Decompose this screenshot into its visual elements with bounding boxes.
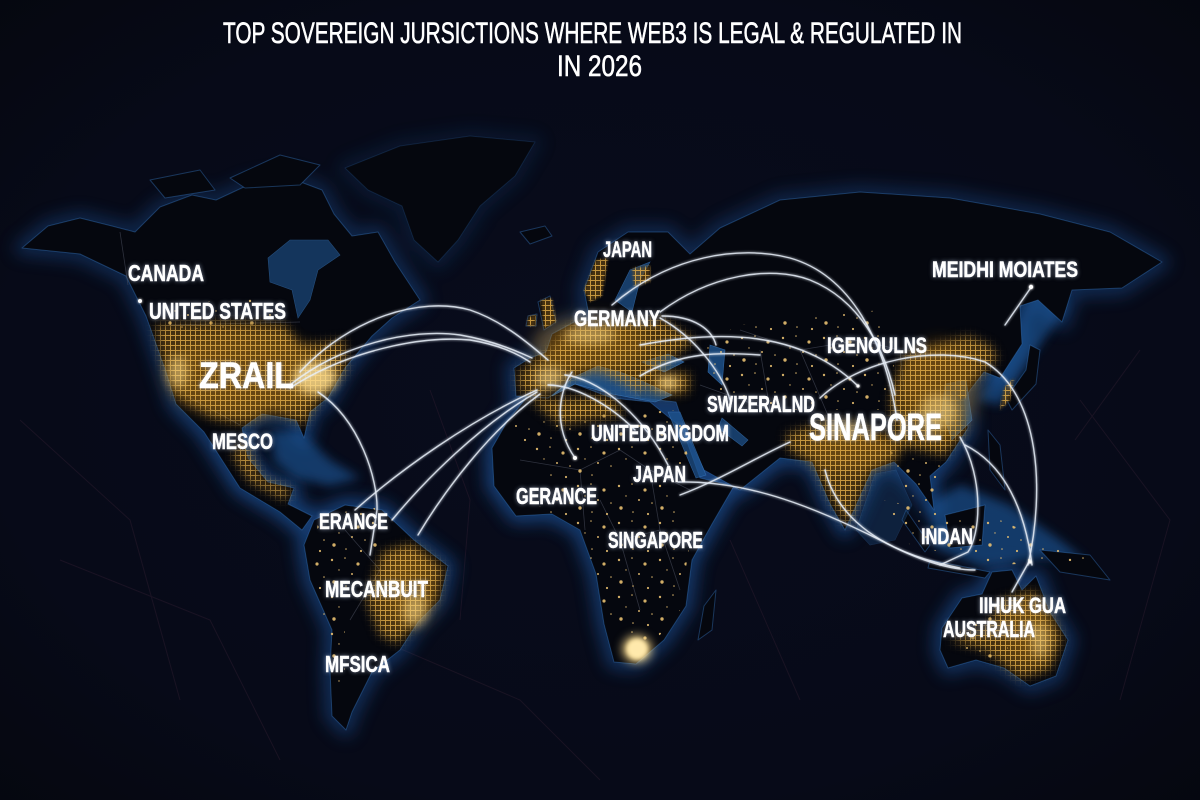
land masses [22, 136, 1162, 730]
Mediterranean [552, 366, 672, 402]
label: Zrail: ZRAIL [199, 355, 294, 396]
label: Germany: GERMANY [574, 306, 660, 331]
country labels [128, 237, 1078, 677]
faint ocean route lines [20, 350, 1170, 780]
label: Gerance: GERANCE [516, 483, 597, 509]
label: Mecanbuit: MECANBUIT [325, 576, 428, 602]
South Africa hub [627, 639, 647, 659]
label: Meidhi Moiates: MEIDHI MOIATES [932, 257, 1078, 282]
label: Igenoulns: IGENOULNS [827, 333, 927, 358]
Hudson Bay [268, 240, 340, 318]
grid city lights [148, 257, 1068, 684]
label: Japan north: JAPAN [603, 237, 652, 262]
Bay of Bengal [856, 470, 912, 545]
arcs across North Africa [565, 375, 668, 465]
label: United Kingdom: UNITED BNGDOM [591, 420, 729, 446]
node markers [138, 285, 1033, 564]
label: Japan: JAPAN [633, 461, 686, 487]
Greenland [345, 136, 535, 262]
world map [22, 136, 1162, 730]
label: Canada: CANADA [128, 260, 204, 286]
shallow seas [270, 268, 1085, 566]
coastal glow [22, 136, 1162, 730]
Yellow Sea [942, 380, 972, 440]
city lights [148, 257, 1084, 684]
South America [304, 505, 448, 730]
label: Australia: AUSTRALIA [943, 616, 1035, 642]
Red Sea and Gulf [668, 412, 748, 478]
label: Mfsica: MFSICA [325, 651, 390, 677]
label: France: ERANCE [319, 509, 388, 534]
Caspian [708, 345, 725, 385]
label: Switzerland: SWIZERALND [707, 391, 815, 417]
Africa [492, 384, 734, 664]
amber haze [165, 317, 1054, 664]
Baltic [615, 262, 650, 312]
arcs from Europe to Asia [612, 253, 897, 420]
arcs from North America to Iberia [300, 306, 548, 372]
country borders [120, 232, 905, 620]
islands [526, 296, 556, 330]
label: Singapore: SINGAPORE [608, 527, 703, 553]
bright urban cores [168, 326, 1049, 662]
arcs to Southeast Asia and Oceania [820, 355, 1037, 565]
connection arcs [290, 253, 1037, 592]
label: Sinapore: SINAPORE [809, 407, 942, 449]
label: Mesco: MESCO [212, 429, 273, 454]
label: Iihuk Gua: IIHUK GUA [979, 593, 1066, 618]
title [223, 17, 962, 83]
label: Indan: INDAN [921, 524, 973, 549]
North America [22, 178, 420, 530]
Australia [940, 570, 1068, 686]
Black Sea [642, 354, 684, 372]
inland seas [268, 240, 972, 545]
label: United States: UNITED STATES [149, 298, 286, 324]
speckled lights [160, 298, 1090, 700]
arcs from Iberia to South America [355, 390, 537, 510]
title: IN 2026 [557, 50, 642, 83]
Eurasia [514, 192, 1162, 530]
